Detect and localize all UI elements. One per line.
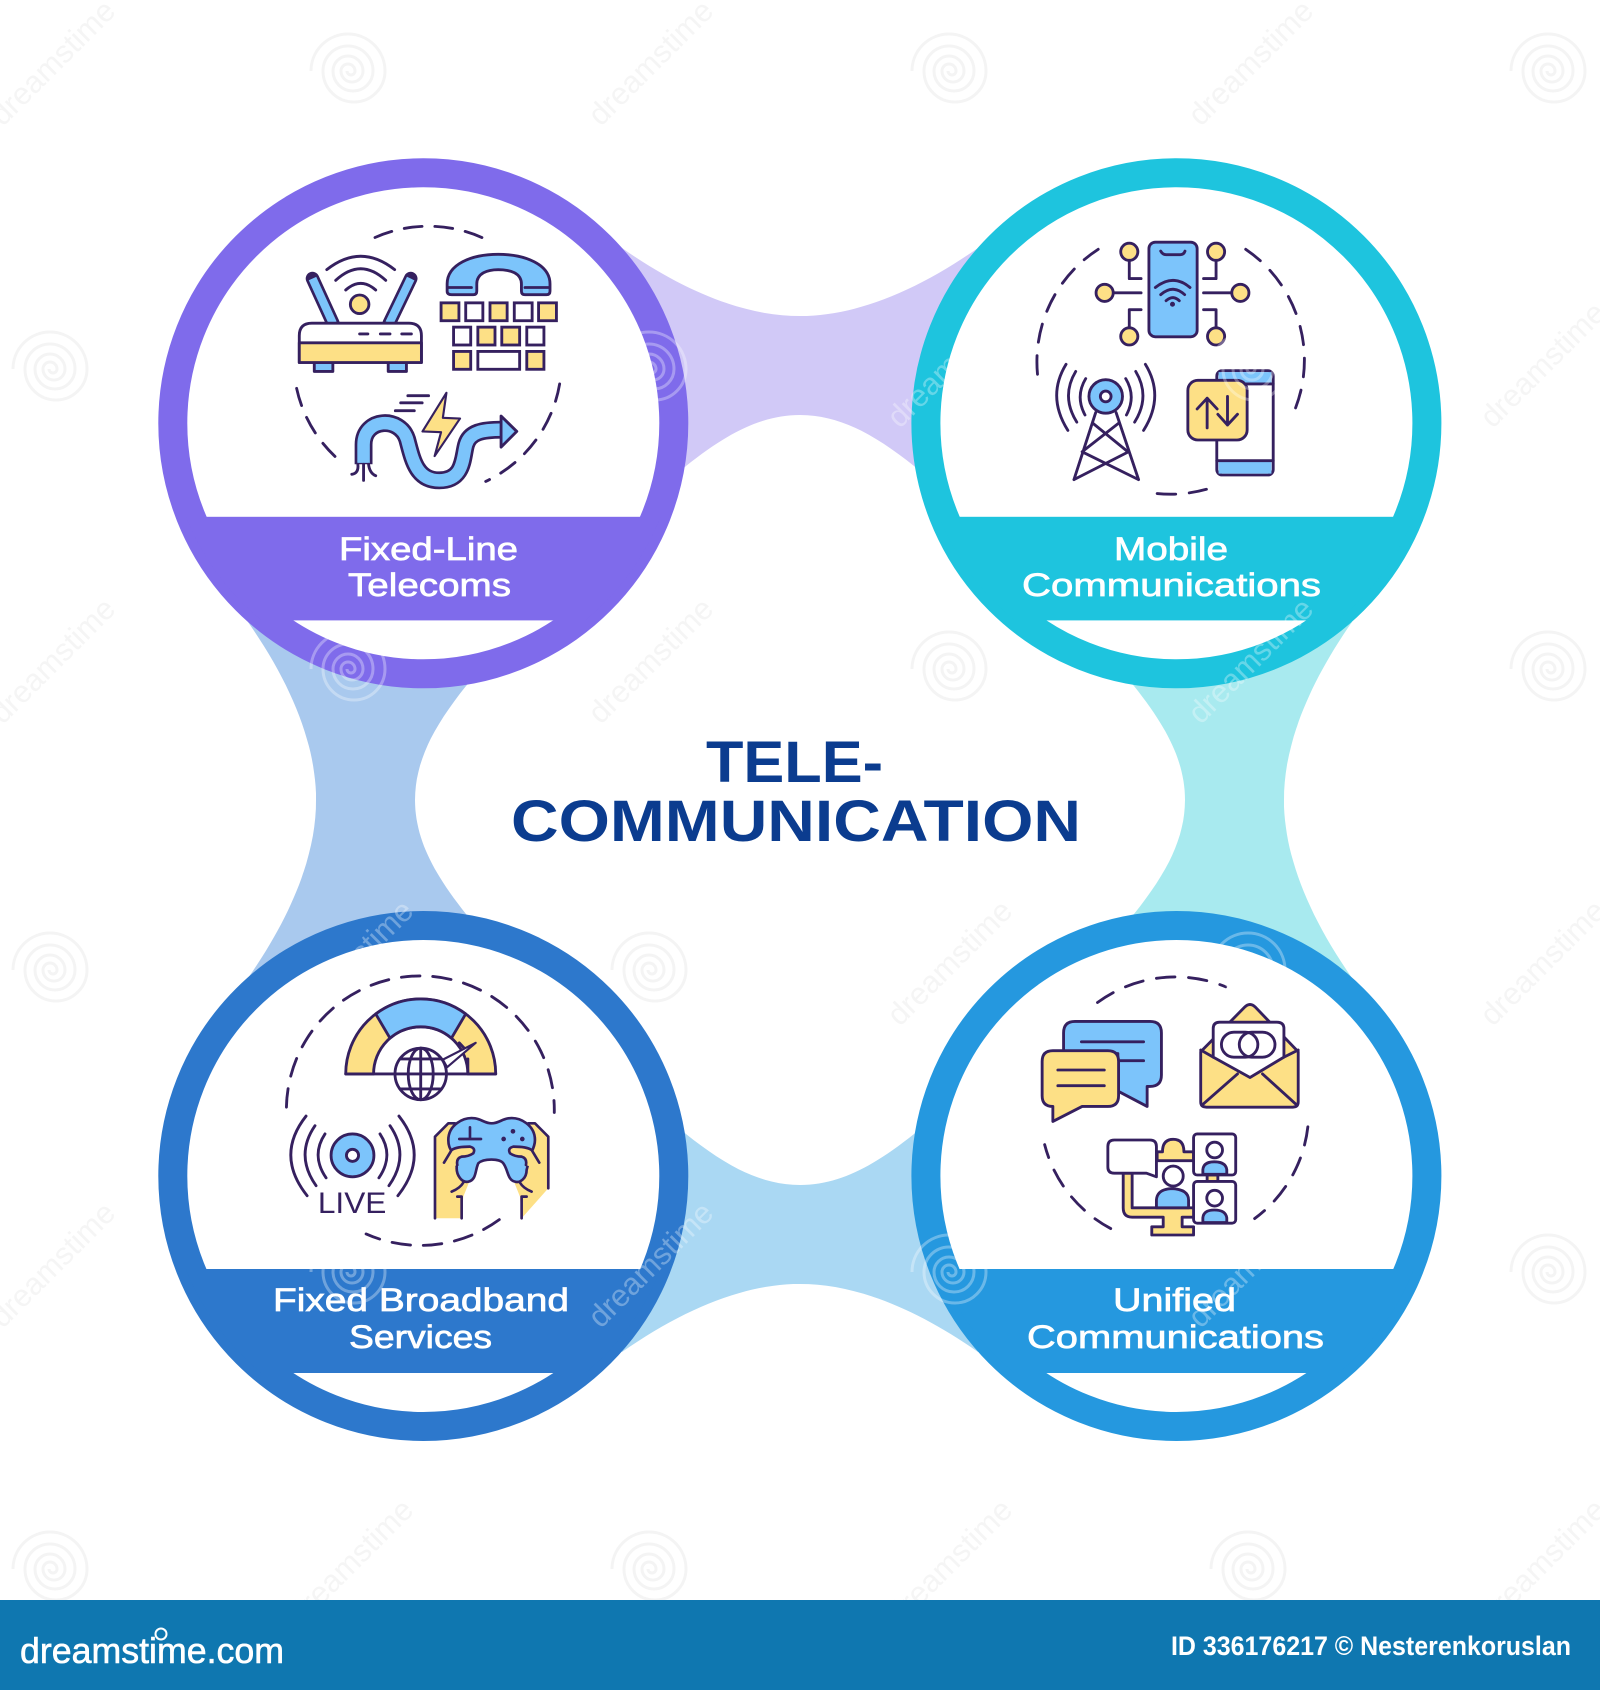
connector: top (purple) bbox=[600, 248, 1000, 476]
panel: fixed-line telecoms bbox=[150, 173, 710, 674]
label text: Communications bbox=[1022, 567, 1321, 603]
icon group: speedometer, live stream, gamepad: LIVE bbox=[318, 1187, 386, 1220]
label text: Unified bbox=[1113, 1282, 1236, 1318]
connector: left (blue) bbox=[248, 600, 476, 1000]
label text: Communications bbox=[1027, 1319, 1324, 1355]
label text bbox=[1027, 1282, 1324, 1355]
icon group: chat, email, video conference bbox=[1042, 977, 1308, 1235]
label text bbox=[339, 531, 518, 603]
panel: mobile communications bbox=[900, 173, 1460, 674]
watermark: background pattern: dreamstime bbox=[1181, 1195, 1320, 1334]
icon group: smartphone network, tower, data transfer bbox=[1037, 242, 1304, 494]
watermark: background pattern: dreamstime bbox=[880, 893, 1019, 1032]
footer logo: dreamstime.com bbox=[20, 1630, 284, 1671]
watermark: background pattern: dreamstime bbox=[1181, 591, 1320, 730]
watermark: background pattern: dreamstime bbox=[281, 295, 420, 434]
label text: Fixed-Line bbox=[339, 531, 518, 567]
watermark: overlay on coloured shapes: dreamstime bbox=[1181, 1195, 1320, 1334]
label text: Fixed Broadband bbox=[273, 1282, 569, 1318]
watermark: background pattern: dreamstime bbox=[281, 893, 420, 1032]
watermark: overlay on coloured shapes: dreamstime bbox=[880, 295, 1019, 434]
connector: bottom (light blue) bbox=[600, 1124, 1000, 1352]
watermark: background pattern: dreamstime bbox=[880, 295, 1019, 434]
label text: Telecoms bbox=[348, 567, 511, 603]
title: COMMUNICATION bbox=[511, 789, 1081, 854]
label band bbox=[206, 516, 640, 620]
footer bar bbox=[0, 1600, 1600, 1690]
watermark: background pattern: dreamstime bbox=[581, 591, 720, 730]
label text: Mobile bbox=[1114, 531, 1228, 567]
watermark: overlay on coloured shapes: dreamstime bbox=[281, 893, 420, 1032]
panel: fixed broadband services bbox=[150, 926, 710, 1426]
watermark: background pattern: dreamstime bbox=[880, 1492, 1019, 1631]
watermark: overlay on coloured shapes: dreamstime bbox=[1181, 591, 1320, 730]
watermark: overlay on coloured shapes: dreamstime bbox=[581, 1195, 720, 1334]
watermark: background pattern: dreamstime bbox=[581, 1195, 720, 1334]
label text bbox=[1022, 531, 1321, 603]
label band bbox=[960, 1269, 1394, 1373]
footer credit: ID 336176217 © Nesterenkoruslan bbox=[1171, 1631, 1571, 1661]
label text: Services bbox=[349, 1319, 492, 1355]
label text bbox=[273, 1282, 569, 1355]
connector: right (teal) bbox=[1124, 600, 1352, 1000]
watermark: overlay on coloured shapes bbox=[281, 295, 1320, 1334]
label band bbox=[206, 1269, 640, 1373]
label band bbox=[960, 516, 1394, 620]
title bbox=[511, 730, 1081, 854]
title: TELE- bbox=[706, 730, 883, 795]
icon group: speedometer, live stream, gamepad bbox=[286, 976, 554, 1245]
icon group: router, phone keypad, cable bbox=[296, 226, 560, 481]
watermark: background pattern: dreamstime bbox=[281, 1492, 420, 1631]
panel: unified communications bbox=[900, 926, 1460, 1426]
